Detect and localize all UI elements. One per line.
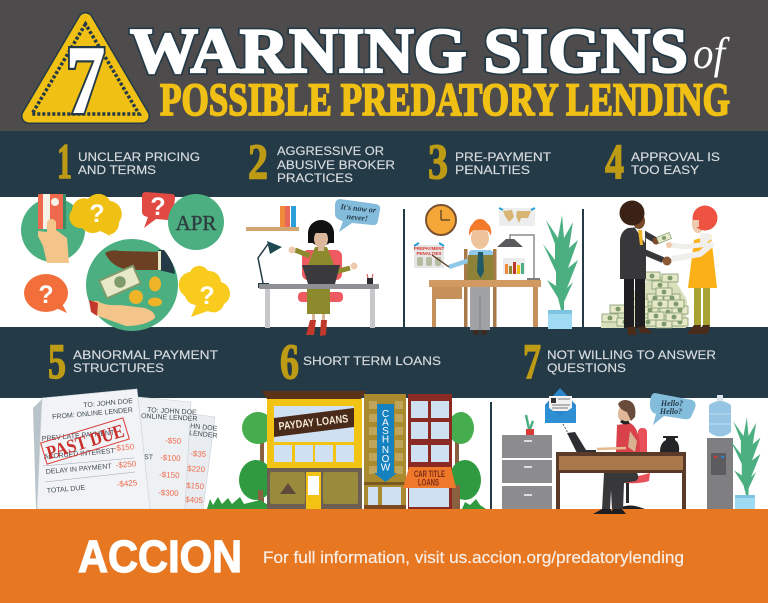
chart poster bbox=[503, 258, 525, 274]
paper 2: ST bbox=[144, 454, 154, 462]
heading 1: UNCLEAR PRICING bbox=[78, 150, 200, 164]
man in suit bbox=[620, 200, 672, 335]
paper 1: FROM: ONLINE LENDER bbox=[52, 407, 133, 421]
cash now building: S bbox=[382, 426, 389, 437]
icon: card in hand bbox=[21, 194, 85, 263]
icon: orange question bubble bbox=[24, 274, 68, 313]
heading 3: 3 bbox=[428, 133, 448, 189]
divider bbox=[490, 402, 492, 509]
paper 3: $405 bbox=[185, 495, 204, 505]
icon: yellow question bubble 2 bbox=[179, 266, 230, 317]
paper 2: -$150 bbox=[159, 470, 180, 480]
divider bbox=[403, 209, 405, 327]
heading 1: AND TERMS bbox=[78, 163, 156, 177]
speech bubble: hello hello bbox=[650, 393, 696, 425]
icon: red question bubble: ? bbox=[150, 193, 166, 221]
man on phone bbox=[597, 400, 650, 510]
heading 2: AGGRESSIVE OR bbox=[277, 144, 384, 158]
wooden desk bbox=[429, 280, 541, 327]
cash now building: A bbox=[382, 418, 389, 428]
heading 3: PENALTIES bbox=[455, 163, 530, 177]
paper 2: -$50 bbox=[165, 436, 182, 446]
paper 3: $150 bbox=[186, 481, 205, 491]
heading 4 bbox=[605, 133, 720, 189]
heading 4: APPROVAL IS bbox=[631, 150, 720, 164]
heading 1 bbox=[57, 133, 200, 189]
icon: yellow question bubble: ? bbox=[89, 200, 105, 228]
cash now building: C bbox=[382, 409, 389, 420]
paper 1: TO: JOHN DOE bbox=[83, 398, 134, 409]
paper 1: -$250 bbox=[115, 459, 137, 470]
speech bubble: it's now or never bbox=[335, 199, 380, 232]
paper 1: -$150 bbox=[113, 442, 135, 453]
footer text: For full information, visit us.accion.org/predatorylending bbox=[263, 548, 684, 567]
white illustration strip top bbox=[0, 197, 768, 327]
paper 2 bbox=[138, 397, 198, 509]
poster: prepayment penalties: PENALTIES bbox=[417, 251, 441, 256]
header background bbox=[0, 0, 768, 131]
heading 6: SHORT TERM LOANS bbox=[303, 354, 441, 368]
icon: money exchange circle bbox=[86, 239, 178, 331]
title: WARNING SIGNS bbox=[130, 15, 688, 86]
paper 1: -$425 bbox=[116, 478, 138, 489]
title: of bbox=[693, 29, 730, 78]
footer background bbox=[0, 509, 768, 603]
icon: potted plant bbox=[543, 215, 578, 329]
speech bubble: it's now or never: never! bbox=[346, 212, 368, 223]
paper 3 bbox=[182, 413, 218, 509]
payday loans building bbox=[262, 391, 366, 509]
filing cabinet bbox=[502, 435, 552, 509]
paper 3: HN DOE bbox=[190, 423, 218, 433]
cursor line bbox=[563, 424, 568, 433]
paper 3: LENDER bbox=[189, 430, 218, 440]
heading 4: 4 bbox=[605, 133, 624, 189]
paper 2: ONLINE LENDER bbox=[141, 413, 198, 423]
car title loans building: CAR TITLE bbox=[414, 469, 445, 479]
dark band middle bbox=[0, 327, 768, 398]
paper 1: DELAY IN PAYMENT bbox=[46, 463, 113, 476]
paper 2: TO: JOHN DOE bbox=[147, 407, 197, 417]
paper 1: TOTAL DUE bbox=[47, 485, 86, 495]
heading 1: 1 bbox=[57, 133, 72, 189]
stamp: past due: PAST DUE bbox=[44, 421, 127, 464]
heading 5 bbox=[48, 333, 219, 389]
poster: prepayment penalties bbox=[414, 243, 445, 268]
paper 1: PREV LATE PAYMENT bbox=[42, 430, 115, 443]
icon: desk lamp bbox=[497, 235, 540, 281]
cash now building: O bbox=[382, 454, 390, 465]
heading 2: PRACTICES bbox=[277, 171, 353, 185]
payday loans building: PAYDAY LOANS bbox=[278, 413, 349, 433]
heading 5: STRUCTURES bbox=[73, 361, 164, 375]
title bbox=[130, 15, 730, 126]
panel: unclear pricing bbox=[21, 192, 230, 331]
desk bbox=[259, 274, 379, 328]
heading 4: TOO EASY bbox=[631, 163, 699, 177]
panel: not willing to answer bbox=[502, 388, 760, 510]
paper 1 bbox=[33, 389, 150, 509]
dark band top bbox=[0, 131, 768, 197]
panel: approval too easy bbox=[601, 200, 718, 335]
heading 2: 2 bbox=[248, 133, 268, 189]
paper 2: -$100 bbox=[160, 453, 181, 463]
desk with laptop bbox=[556, 432, 686, 509]
heading 7: QUESTIONS bbox=[547, 361, 626, 375]
heading 3: PRE-PAYMENT bbox=[455, 150, 552, 164]
icon: warning triangle with 7 bbox=[29, 20, 142, 133]
icon: wall clock bbox=[426, 205, 456, 235]
icon: bookshelf bbox=[246, 206, 299, 231]
speech bubble: it's now or never: It's now or bbox=[339, 202, 377, 215]
icon: APR circle: APR bbox=[176, 211, 216, 235]
icon: warning triangle with 7: 7 bbox=[66, 26, 105, 133]
heading 6: 6 bbox=[280, 333, 299, 389]
icon: envelope bbox=[545, 388, 576, 423]
paper 2: -$300 bbox=[158, 488, 179, 498]
water cooler bbox=[707, 395, 733, 509]
heading 3 bbox=[428, 133, 552, 189]
icon: warning triangle with 7: 7 bbox=[66, 26, 105, 133]
panel: short term loans bbox=[207, 391, 486, 509]
cash now building bbox=[364, 394, 406, 509]
man at desk bbox=[432, 219, 496, 335]
title: WARNING SIGNS bbox=[130, 15, 688, 86]
icon: world map bbox=[499, 208, 535, 226]
paper 3: -$35 bbox=[190, 449, 207, 459]
icon: red question bubble bbox=[142, 192, 175, 228]
speech bubble: hello hello: Hello? bbox=[660, 399, 683, 408]
woman at desk bbox=[288, 220, 358, 336]
icon: desk lamp bbox=[258, 241, 282, 288]
panel: past due papers bbox=[33, 389, 218, 509]
divider bbox=[582, 209, 584, 327]
speech bubble: hello hello: Hello? bbox=[659, 407, 682, 416]
heading 7 bbox=[523, 333, 716, 389]
icon: yellow question bubble 2: ? bbox=[199, 282, 215, 310]
panel: abusive broker bbox=[246, 199, 380, 336]
icon: potted plant bbox=[731, 417, 760, 509]
feet overlapping footer bbox=[593, 509, 626, 514]
woman in yellow dress bbox=[666, 206, 718, 334]
car title loans building: LOANS bbox=[418, 478, 439, 488]
trees right bbox=[448, 412, 486, 509]
panel: pre-payment penalties bbox=[414, 205, 578, 335]
icon: pile of money bbox=[601, 272, 688, 328]
icon: orange question bubble: ? bbox=[38, 281, 54, 309]
heading 7: 7 bbox=[523, 333, 541, 389]
cash now building: H bbox=[382, 434, 389, 446]
heading 5: 5 bbox=[48, 333, 66, 389]
paper 1: ACCRUED INTEREST bbox=[44, 448, 116, 461]
heading 6 bbox=[280, 333, 441, 389]
heading 2 bbox=[248, 133, 395, 189]
cash now building: W bbox=[381, 462, 391, 474]
icon: yellow question bubble bbox=[69, 194, 122, 237]
heading 5: ABNORMAL PAYMENT bbox=[73, 348, 219, 362]
car title loans building bbox=[403, 394, 456, 509]
icon: small plant bbox=[526, 415, 534, 435]
icon: APR circle bbox=[168, 194, 224, 250]
trees left bbox=[207, 412, 275, 509]
icon: telephone bbox=[660, 436, 679, 452]
white illustration strip bottom bbox=[0, 398, 768, 509]
heading 2: ABUSIVE BROKER bbox=[277, 158, 395, 172]
poster: prepayment penalties: PREPAYMENT bbox=[414, 246, 445, 251]
cash now building: N bbox=[382, 445, 389, 456]
paper 3: $220 bbox=[187, 464, 206, 474]
footer logo: ACCION: ACCION bbox=[78, 531, 242, 582]
heading 7: NOT WILLING TO ANSWER bbox=[547, 348, 716, 362]
